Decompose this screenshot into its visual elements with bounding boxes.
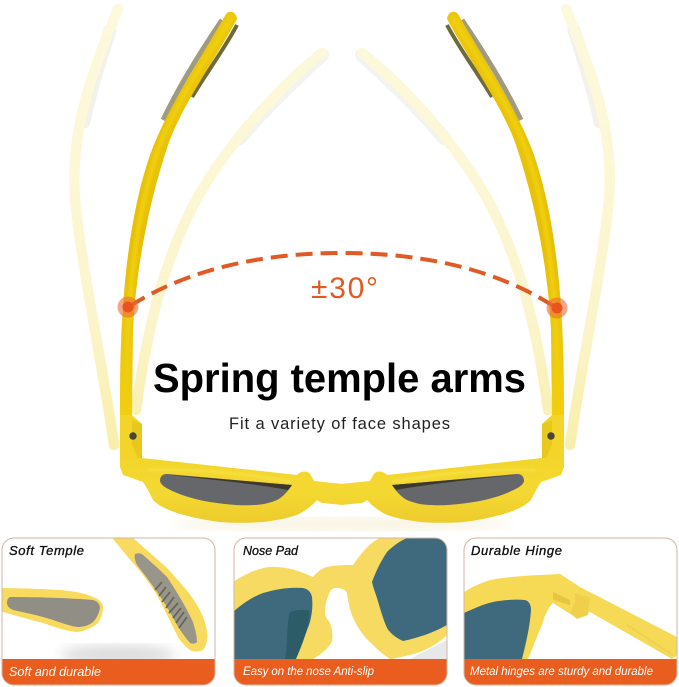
nose gap: [313, 588, 390, 659]
title: Spring temple arms: [153, 355, 526, 401]
panel heading: Soft Temple: [9, 543, 84, 558]
panel border: [234, 538, 447, 685]
light backdrop corner: [410, 640, 447, 659]
frame shadow: [172, 518, 512, 530]
caption: Soft and durable: [9, 665, 101, 679]
caption: Metal hinges are sturdy and durable: [470, 666, 653, 678]
subtitle: Fit a variety of face shapes: [229, 415, 450, 433]
caption: Easy on the nose Anti-slip: [243, 666, 375, 678]
left screw: [129, 432, 137, 440]
right screw: [547, 432, 555, 440]
caption bar: [2, 659, 215, 685]
frame and temple: [464, 574, 677, 659]
left lens: [233, 588, 312, 659]
panel: nose pad: [233, 538, 447, 685]
lens: [464, 600, 531, 659]
pale ghost temple arm, inner left: [136, 53, 322, 410]
panel: soft temple: [0, 538, 215, 685]
panel heading: Nose Pad: [243, 544, 299, 558]
main temple arm, right: [447, 12, 564, 420]
panel border: [2, 538, 215, 685]
pale ghost temple arm, far right: [566, 9, 610, 445]
panel: durable hinge: [464, 538, 677, 685]
ground shadow: [60, 643, 176, 659]
panel heading: Durable Hinge: [471, 543, 562, 558]
left lens: [160, 474, 292, 505]
caption bar: [464, 659, 677, 685]
grip ridges: [155, 582, 187, 628]
hinge pin: [553, 592, 570, 605]
left pivot marker: [118, 296, 138, 318]
main temple arm, left: [120, 12, 237, 420]
pale ghost temple arm, inner right: [362, 53, 548, 410]
panel border: [464, 538, 677, 685]
right lens: [392, 474, 524, 505]
caption bar: [234, 659, 447, 685]
pale ghost temple arm, far left: [74, 9, 118, 445]
glasses frame, right half: [341, 415, 564, 523]
temple piece, horizontal: [0, 588, 103, 632]
right pivot marker: [546, 298, 568, 318]
temple piece, angled: [112, 538, 207, 652]
glasses frame, left half: [120, 415, 343, 523]
yellow frame: [233, 538, 447, 659]
right lens: [372, 538, 447, 641]
angle arc, dashed: [118, 253, 568, 318]
hinge knuckle: [570, 593, 590, 619]
angle label: ±30°: [311, 272, 378, 305]
temple engraving: [627, 625, 673, 655]
